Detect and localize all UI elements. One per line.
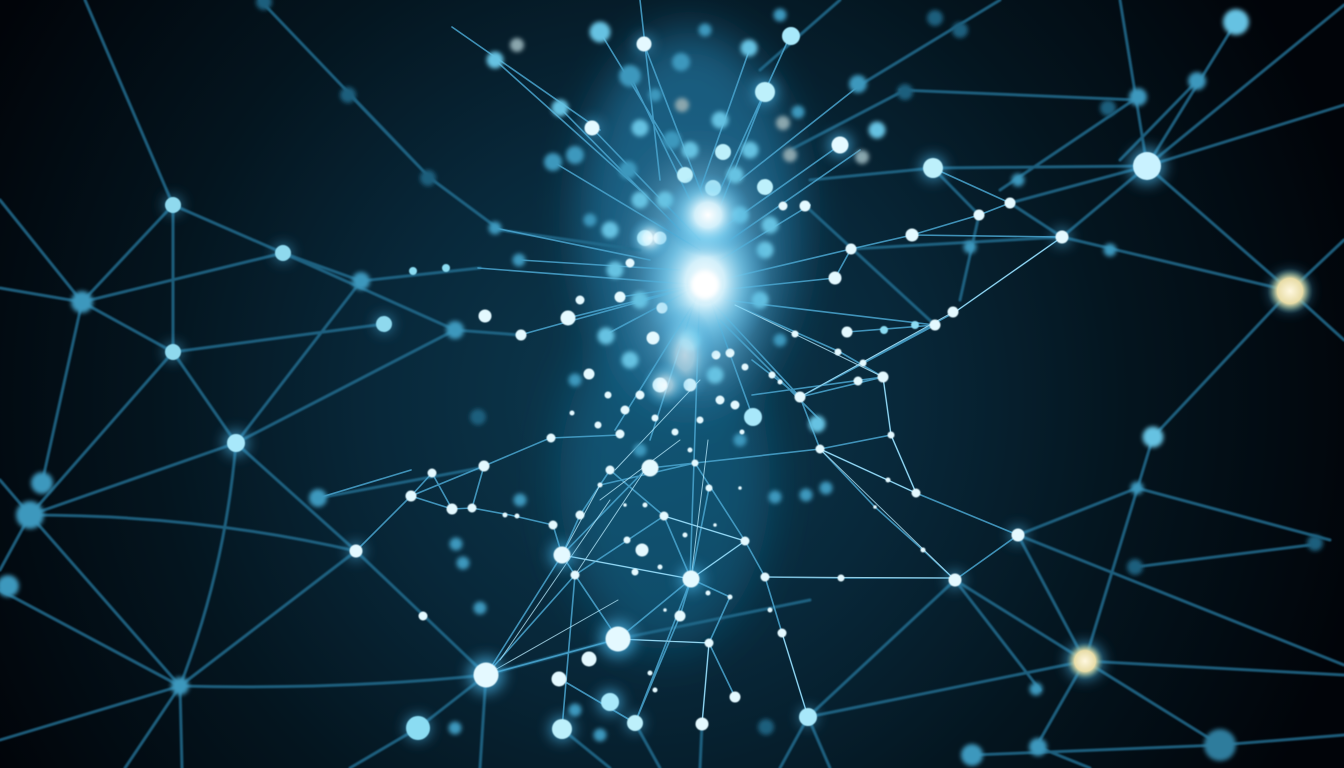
bright nodes: [173, 36, 1147, 729]
centre network lines: [318, 0, 1062, 729]
central bright core: [628, 173, 771, 409]
node glows: [173, 44, 1290, 729]
central blue haze: [560, 30, 800, 650]
warm nodes: [1066, 268, 1313, 680]
bright thin filaments: [486, 237, 1062, 724]
